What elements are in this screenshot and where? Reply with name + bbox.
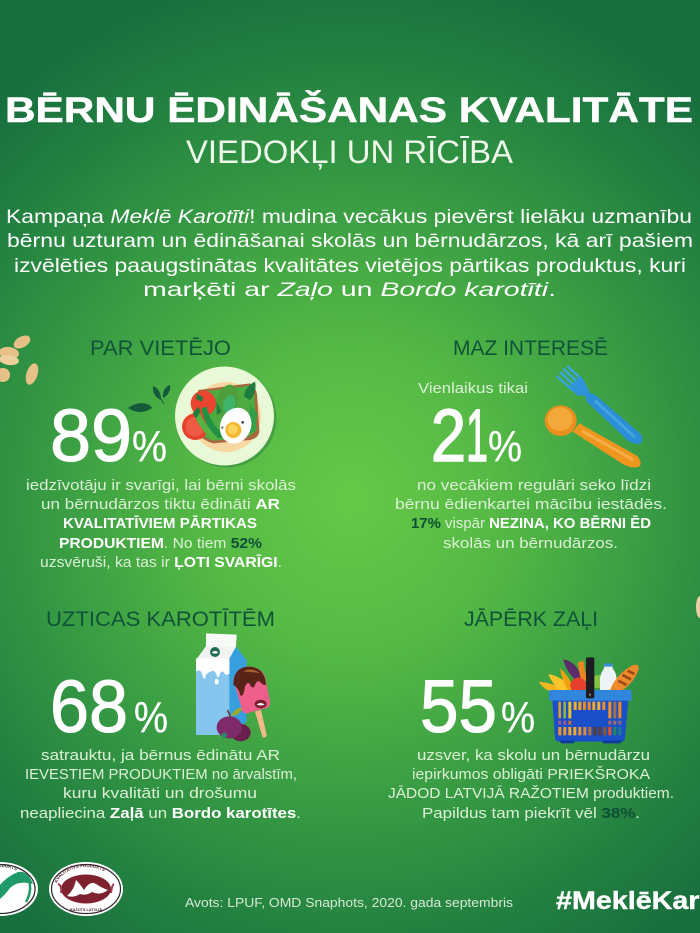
intro paragraph bbox=[6, 206, 693, 301]
heading: jāpērk zaļi: JĀPĒRK ZAĻI bbox=[464, 607, 598, 631]
body text: Papildus tam piekrīt vēl 38% . bbox=[422, 805, 640, 822]
body text: KVALITATĪVIEM PĀRTIKAS bbox=[63, 515, 257, 532]
logo: green spoon label bbox=[0, 862, 38, 916]
source note: Avots: LPUF, OMD Snaphots, 2020. gada septembris bbox=[185, 895, 514, 910]
stat: 89%: % bbox=[132, 422, 167, 471]
icon: blue fork bbox=[557, 367, 642, 444]
icon: oat flakes left bbox=[0, 333, 41, 386]
panel: maz interesē bbox=[395, 336, 667, 552]
stat: 55%: % bbox=[501, 693, 535, 742]
body text: iedzīvotāju ir svarīgi, lai bērni skolās bbox=[26, 477, 296, 494]
intro paragraph: bērnu uzturam un ēdināšanai skolās un bērnudārzos, kā arī pašiem bbox=[7, 230, 693, 252]
stat: 55%: 55 bbox=[420, 665, 497, 748]
body text: iepirkumos obligāti PRIEKŠROKA bbox=[412, 766, 650, 783]
heading: maz interesē: MAZ INTERESĒ bbox=[453, 336, 608, 360]
title: BĒRNU ĒDINĀŠANAS KVALITĀTE bbox=[5, 90, 693, 130]
stat: 21%: 2 bbox=[431, 394, 466, 477]
icon: milk carton, plums and popsicle bbox=[196, 633, 270, 741]
heading: par vietējo: PAR VIETĒJO bbox=[90, 336, 231, 360]
body text: JĀDOD LATVIJĀ RAŽOTIEM produktiem. bbox=[388, 785, 674, 802]
body text: neapliecina Zaļā un Bordo karotītes . bbox=[20, 805, 301, 822]
heading: uzticas karotītēm: UZTICAS KAROTĪTĒM bbox=[46, 607, 275, 631]
body text: skolās un bērnudārzos. bbox=[443, 535, 618, 552]
panel: uzticas karotītēm bbox=[20, 607, 301, 822]
panel: jāpērk zaļi bbox=[388, 607, 674, 822]
stat: 21%: 1 bbox=[466, 394, 488, 477]
stat: 68%: % bbox=[134, 693, 168, 742]
body text bbox=[395, 477, 667, 552]
body text: IEVESTIEM PRODUKTIEM no ārvalstīm, bbox=[25, 766, 297, 783]
logo: bordo spoon label bbox=[49, 862, 123, 916]
body text bbox=[20, 747, 301, 822]
logo: bordo spoon label: RAŽOTS LATVIJĀ bbox=[70, 907, 102, 912]
body text: kuru kvalitāti un drošumu bbox=[63, 785, 257, 802]
stat: 21%: % bbox=[488, 422, 522, 471]
intro paragraph: marķēti ar Zaļo un Bordo karotīti . bbox=[143, 279, 556, 301]
subtitle: VIEDOKĻI UN RĪCĪBA bbox=[186, 134, 514, 170]
body text: no vecākiem regulāri seko līdzi bbox=[417, 477, 651, 494]
panel: par vietējo bbox=[26, 336, 296, 571]
body text: 17% vispār NEZINA, KO BĒRNI ĒD bbox=[411, 515, 651, 532]
body text: PRODUKTIEM . No tiem 52% bbox=[59, 535, 262, 552]
lead-in text: Vienlaikus tikai bbox=[418, 380, 528, 397]
icon: grocery basket bbox=[539, 657, 639, 743]
body text bbox=[388, 747, 674, 822]
stat: 68%: 68 bbox=[50, 665, 128, 748]
icon: leaves bbox=[128, 385, 170, 412]
body text: uzsvēruši, ka tas ir ĻOTI SVARĪGI . bbox=[40, 554, 282, 571]
body text: satrauktu, ja bērnus ēdinātu AR bbox=[41, 747, 280, 764]
body text: bērnu ēdienkartei mācību iestādēs. bbox=[395, 496, 667, 513]
icon: orange spoon bbox=[545, 405, 641, 467]
body text bbox=[26, 477, 296, 571]
intro paragraph: Kampaņa Meklē Karotīti ! mudina vecākus pievērst lielāku uzmanību bbox=[6, 206, 692, 228]
stat: 89%: 89 bbox=[50, 394, 132, 477]
intro paragraph: izvēlēties paaugstinātas kvalitātes vietējos pārtikas produktus, kuri bbox=[14, 255, 686, 277]
icon: avocado toast bbox=[175, 366, 276, 468]
body text: uzsver, ka skolu un bērnudārzu bbox=[417, 747, 650, 764]
stat: 68% bbox=[50, 665, 168, 748]
body text: un bērnudārzos tiktu ēdināti AR bbox=[41, 496, 280, 513]
icon: oat flake right edge bbox=[696, 596, 700, 618]
stat: 21% bbox=[431, 394, 522, 477]
logo: bordo spoon label: KVALITATĪVS PRODUKTS bbox=[54, 864, 105, 883]
